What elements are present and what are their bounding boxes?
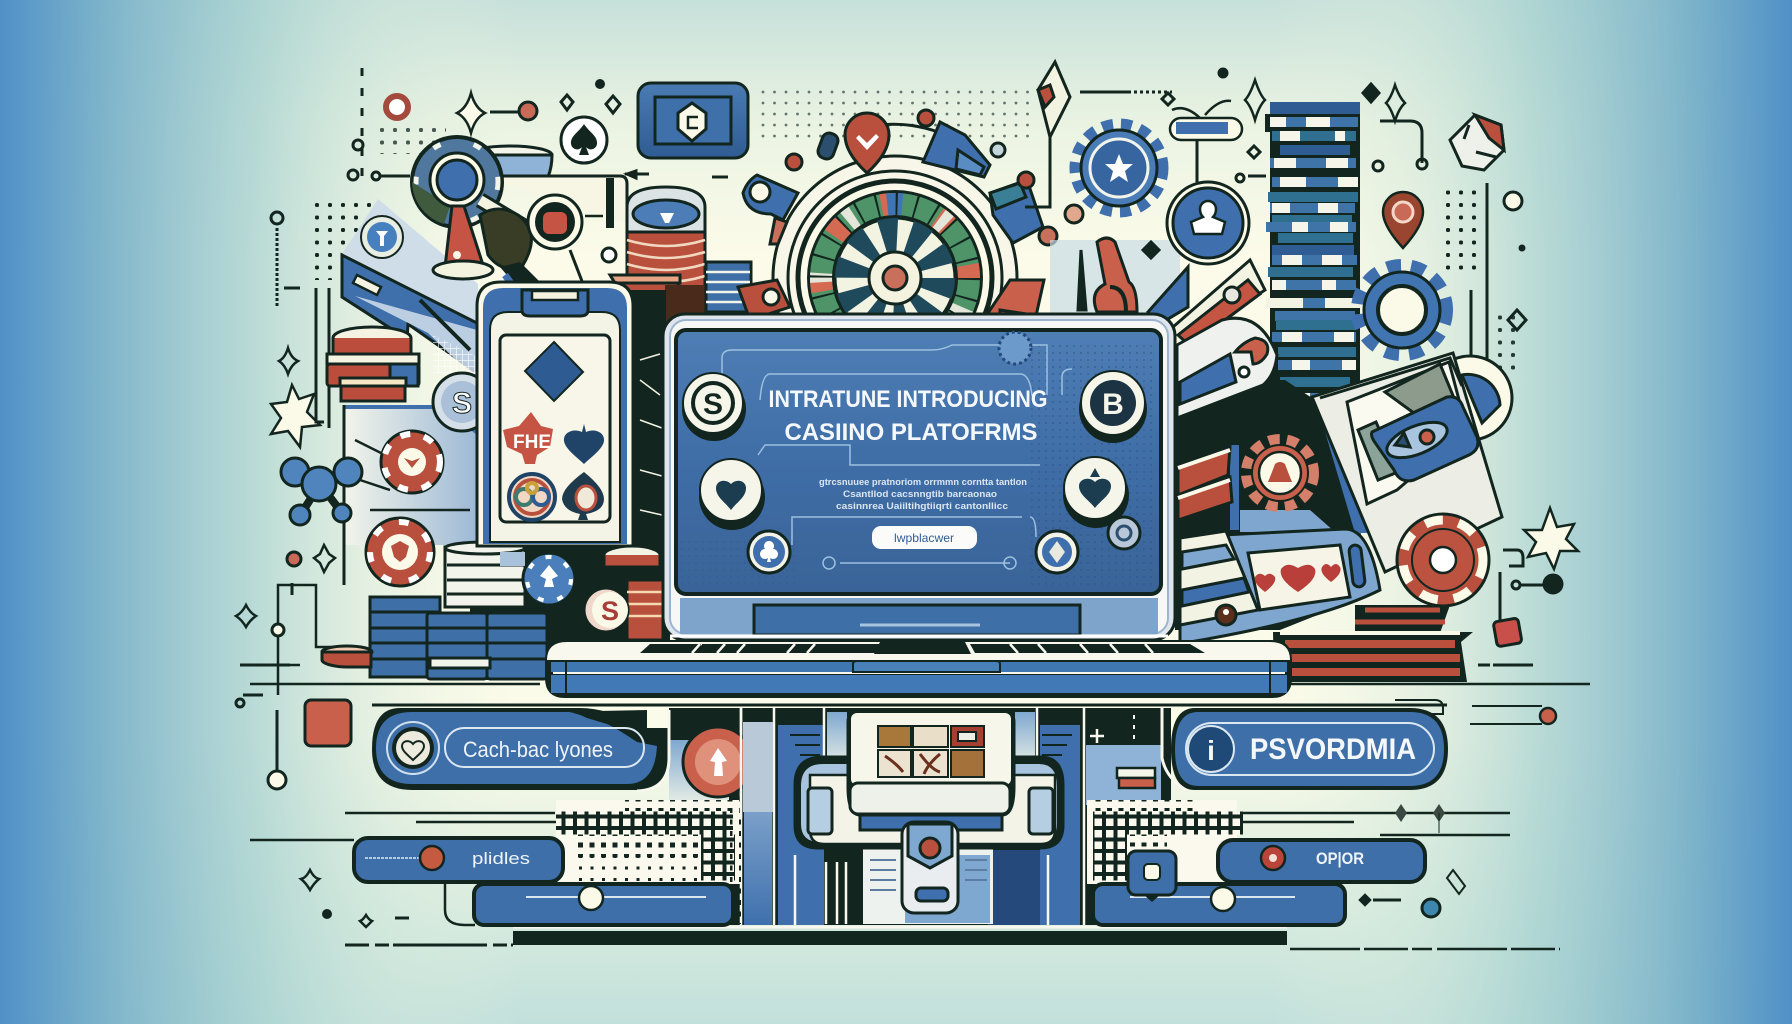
red square left	[305, 700, 351, 746]
blue strips right cluster	[1230, 413, 1369, 533]
blue ribbon panels	[342, 199, 478, 585]
red handle right of wheel	[1078, 238, 1137, 312]
right small pill label: OP|OR	[1316, 849, 1364, 868]
screen small text	[819, 477, 1027, 511]
screen button: lwpblacwer	[894, 531, 954, 545]
roulette colored ring	[791, 174, 999, 382]
diamond suit	[525, 342, 583, 401]
bitcoin token: B	[1102, 388, 1124, 421]
tower of chips	[1265, 102, 1360, 432]
small red chip right	[1117, 768, 1155, 788]
diamond token	[1036, 531, 1078, 573]
dot field left	[314, 198, 376, 280]
dot field top center	[760, 84, 1030, 144]
blue chip stacks	[370, 542, 547, 679]
small right pill	[1218, 840, 1425, 882]
dark band left of laptop	[630, 290, 666, 640]
screen heading	[768, 386, 1048, 446]
white curved device	[1177, 318, 1277, 418]
pill label: PSVORDMIA	[1250, 733, 1416, 766]
screen heading: CASIINO PLATOFRMS	[784, 419, 1038, 446]
decorative left icons	[236, 68, 537, 945]
pill label	[445, 728, 644, 767]
roulette wheel	[738, 110, 1083, 400]
dot field upper left	[376, 126, 446, 154]
spade suit	[564, 424, 604, 464]
screen small text: Csantllod cacsnngtib barcaonao	[843, 489, 998, 499]
red chip bottom	[683, 708, 773, 818]
circuit lines on screen	[722, 345, 1072, 569]
phone	[477, 282, 633, 546]
halftone left	[556, 790, 741, 924]
left small pill label: plidles	[472, 849, 530, 868]
club token	[748, 531, 790, 573]
lower right bar	[1093, 884, 1345, 925]
blue half disc behind envelope	[1428, 356, 1512, 440]
phone playing card	[500, 335, 610, 522]
laptop keyboard	[640, 642, 1205, 654]
red single chip low left	[322, 646, 372, 667]
bottom base bar	[513, 931, 1287, 945]
small token	[1108, 517, 1140, 549]
red casino chip left lower	[366, 518, 434, 586]
stacked red chips left	[327, 327, 419, 401]
horizontal shelf lines	[240, 665, 1590, 949]
envelope card	[1312, 353, 1502, 572]
silver dollar coin: S	[452, 387, 472, 420]
dollar token: S	[703, 388, 723, 421]
dot field right lower	[1493, 312, 1523, 374]
red strap	[1148, 260, 1265, 350]
mandala chip	[509, 474, 555, 520]
halftone right	[1087, 800, 1243, 884]
small decorative stars top	[561, 80, 728, 178]
dice	[1450, 115, 1504, 170]
right main pill	[1162, 708, 1448, 790]
laptop base	[545, 640, 1292, 698]
screen small text: casinnrea Uaiiltihgtiiqrti cantonllicc	[836, 501, 1008, 511]
info button	[1188, 726, 1234, 772]
person badge	[1167, 182, 1249, 264]
dollar token	[682, 373, 746, 441]
silver dollar coin	[433, 373, 491, 431]
dot field right	[1444, 186, 1482, 278]
screen small text: gtrcsnuuee pratnoriom orrmmn corntta tantlon	[819, 477, 1027, 487]
spade token	[1063, 457, 1129, 528]
small coins at laptop corner	[523, 546, 663, 640]
bitcoin token	[1079, 371, 1147, 443]
bottom central frame	[372, 705, 1447, 925]
red large chip	[1397, 514, 1489, 606]
dark band right cluster	[1175, 380, 1380, 630]
spade badge	[561, 117, 607, 163]
small coins at laptop corner: S	[601, 596, 619, 626]
red maple badge: FHE	[513, 432, 551, 453]
dark patch behind coins	[470, 530, 670, 680]
lever wheel	[361, 137, 627, 302]
laptop hinge bar	[670, 598, 1168, 636]
red striped panels	[1178, 447, 1232, 520]
screen heading: INTRATUNE INTRODUCING	[768, 386, 1048, 413]
pale backdrop right of wheel	[1050, 240, 1180, 314]
tall chip stack center left	[610, 187, 751, 393]
left main pill	[372, 708, 669, 791]
white cog gear	[1358, 266, 1446, 354]
small left pill	[354, 838, 563, 882]
screen button	[872, 526, 977, 549]
heart card slot	[1180, 529, 1380, 642]
top card icon	[638, 83, 748, 158]
blue molecule icon	[281, 458, 362, 525]
blue square pin	[1128, 851, 1176, 902]
red maple badge	[503, 412, 553, 464]
teal bead	[1422, 899, 1440, 917]
red square charm	[1493, 618, 1522, 647]
printer photos	[878, 726, 984, 777]
small icons top right	[1025, 62, 1405, 207]
blue clamps	[738, 110, 1083, 336]
heart button	[387, 722, 439, 774]
red gear	[1247, 440, 1313, 506]
decorative right icons	[1143, 121, 1578, 665]
pill label	[1186, 723, 1434, 775]
shelf diamonds	[1395, 804, 1445, 833]
heart token	[699, 459, 765, 530]
gear with star	[1075, 124, 1163, 212]
pin heart	[845, 113, 889, 173]
info button: i	[1207, 735, 1215, 766]
lower left bar	[445, 880, 733, 925]
laptop	[663, 314, 1175, 640]
suit swirl	[562, 472, 604, 520]
screen gear	[999, 332, 1031, 364]
red card stacks	[1273, 605, 1473, 682]
red casino chip left upper	[381, 431, 443, 493]
ribbon gift icon	[1170, 101, 1242, 182]
center printer device	[795, 712, 1063, 924]
location pin	[1383, 192, 1423, 248]
pill label: Cach-bac lyones	[463, 737, 613, 762]
